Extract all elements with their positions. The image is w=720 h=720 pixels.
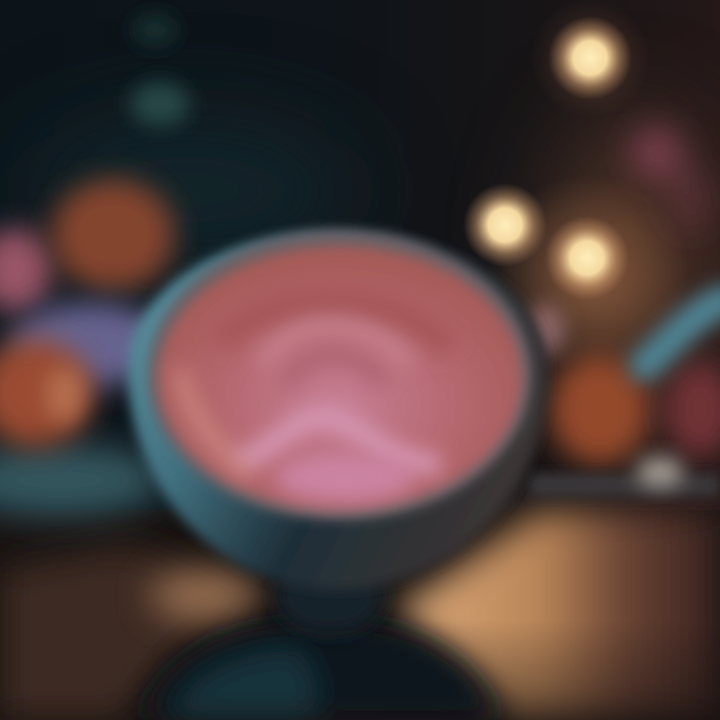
background [38,0,720,510]
bowl stem [268,582,393,634]
interior swirls [180,301,450,475]
bowl body [128,232,548,590]
base: dark reflection under bowl [140,620,500,720]
bowl [128,230,548,633]
icon: green blurs top left [130,15,190,126]
fruit: right side spheres and blue ribbon [525,300,720,496]
bowl rim [148,230,532,520]
bowl interior [158,246,522,510]
icon: pink blur top right [633,128,708,232]
lights: glowing bokeh [464,8,679,360]
floor: warm reflection [0,510,720,720]
fruit: left side spheres [0,179,175,516]
